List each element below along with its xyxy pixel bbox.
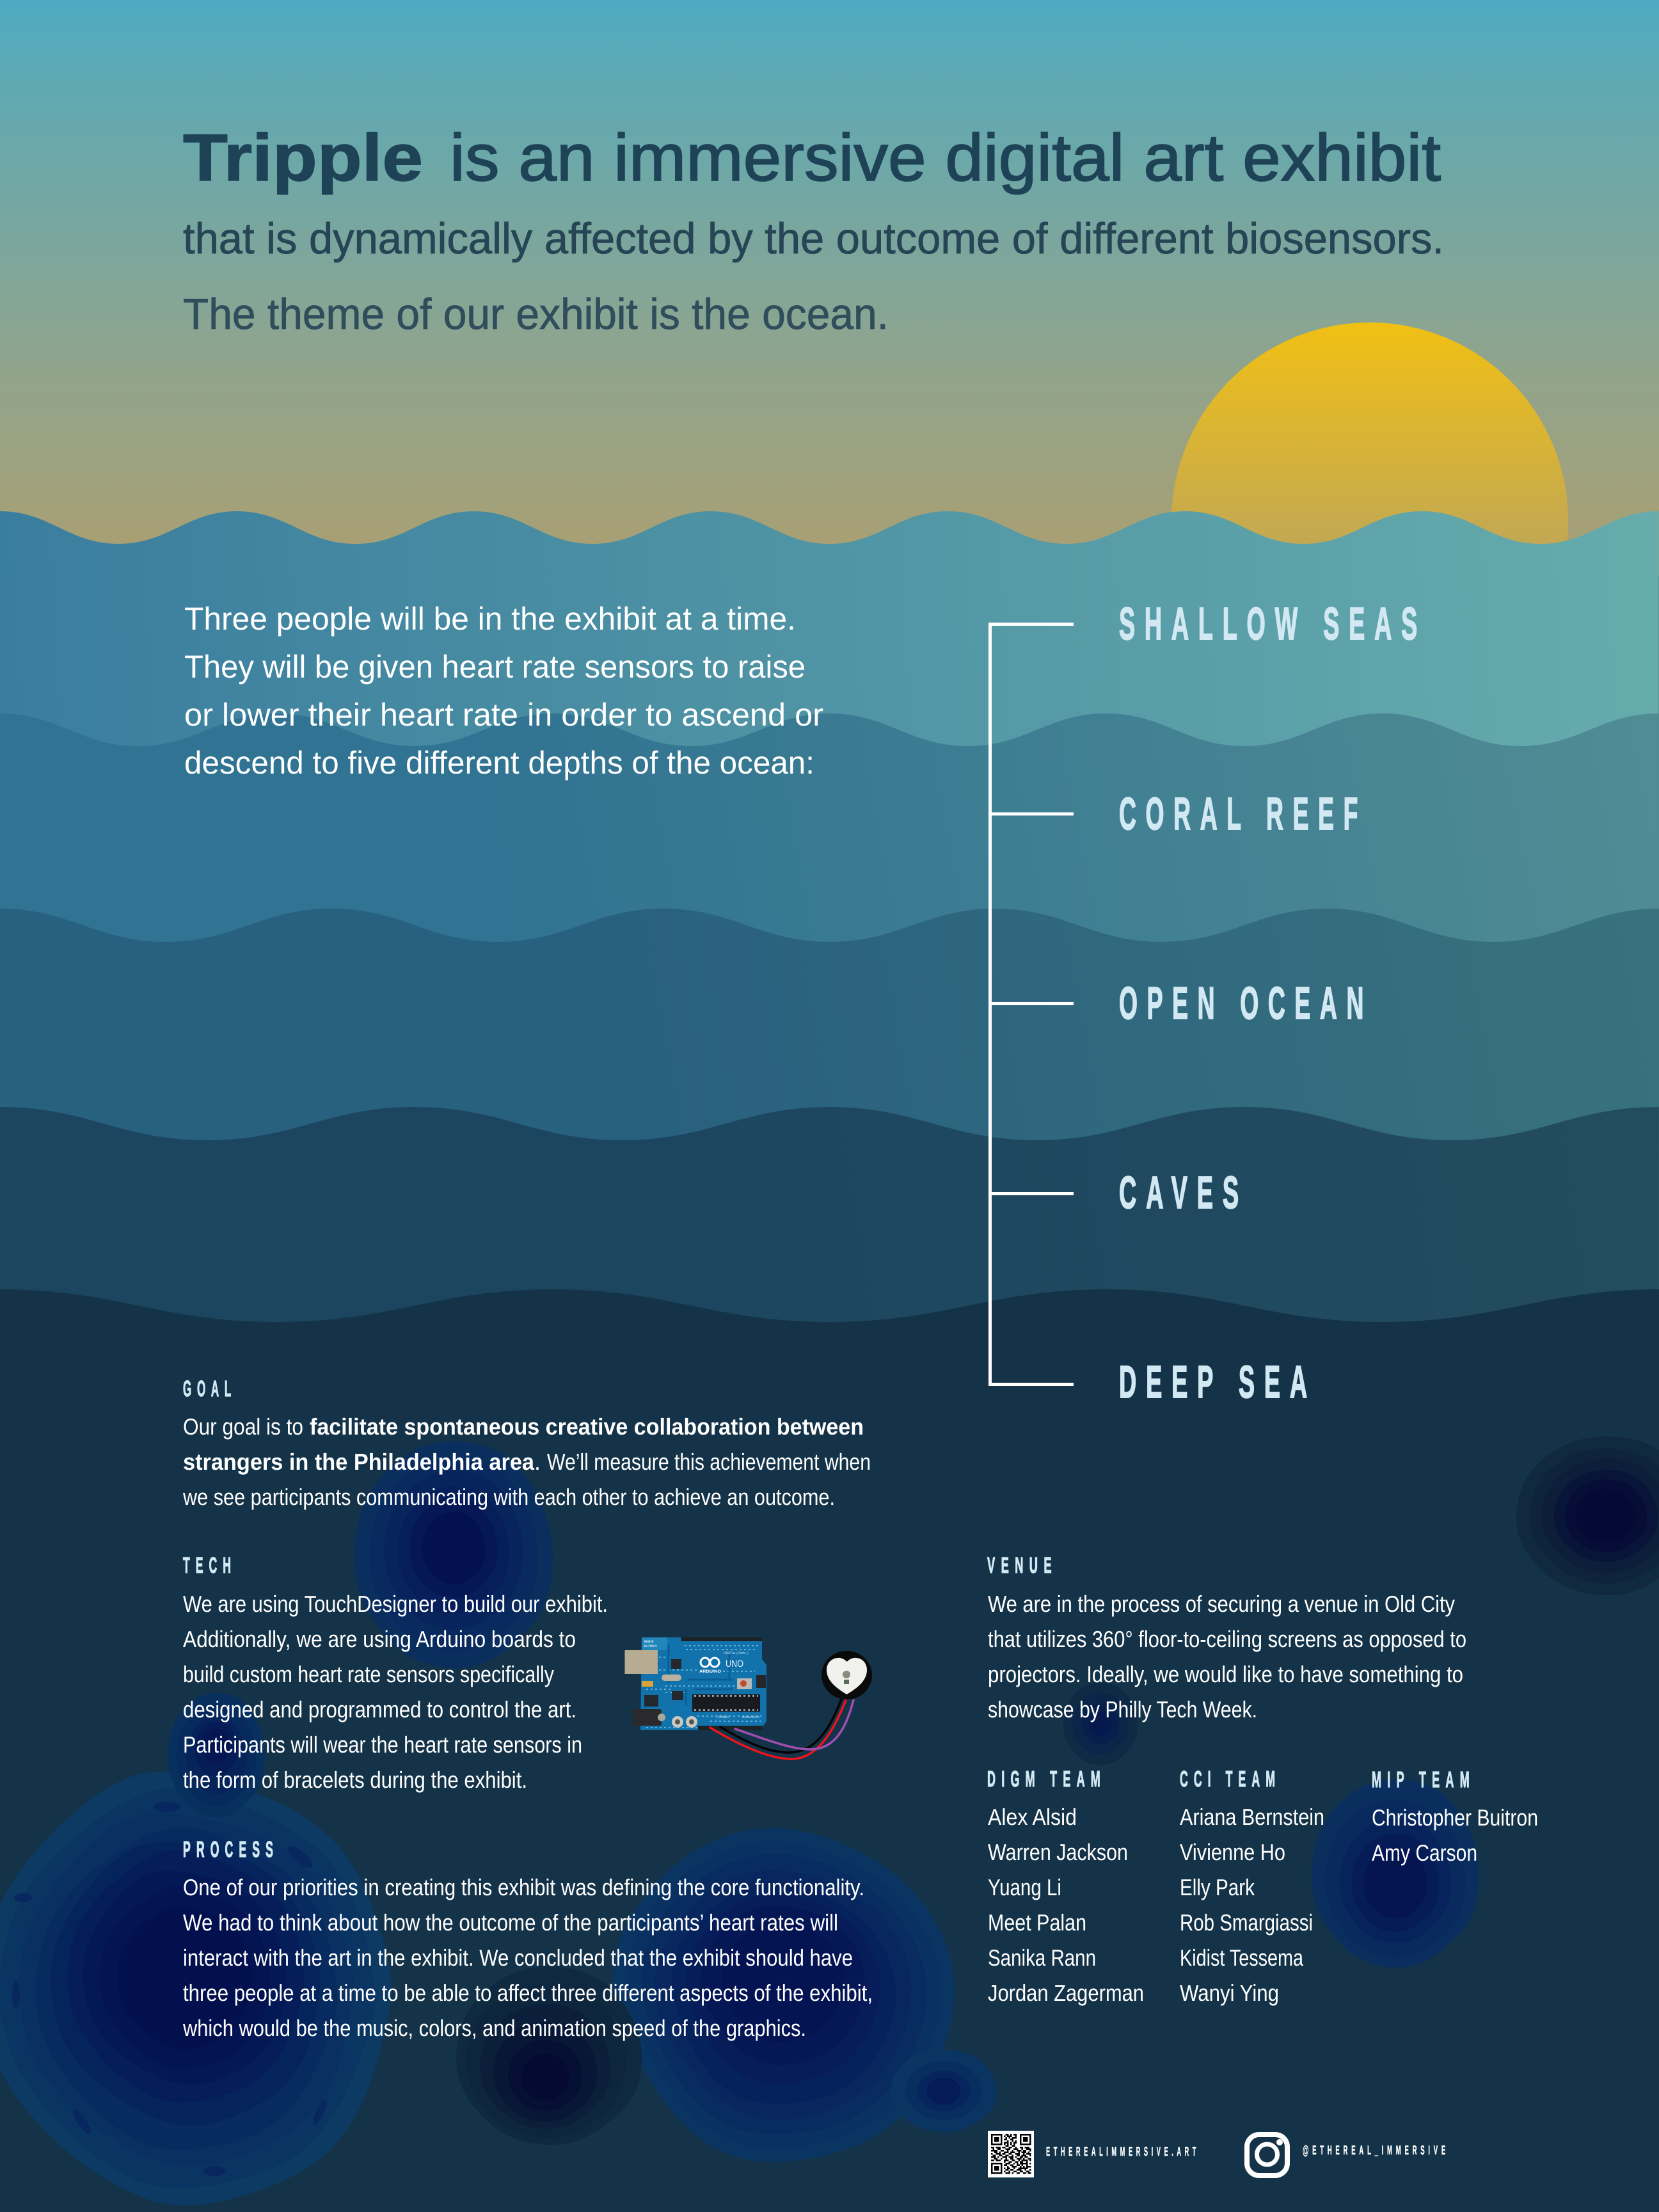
team: DIGM: [987, 1767, 1144, 2006]
process body: We had to think about how the outcome of the participants’ heart rates will: [183, 1909, 838, 1936]
venue body: that utilizes 360° floor-to-ceiling screens as opposed to: [988, 1626, 1466, 1652]
process body: [182, 1874, 873, 2041]
tech heading: TECH: [183, 1553, 237, 1578]
section: goal: [182, 1376, 871, 1510]
tech body: Additionally, we are using Arduino boards to: [183, 1626, 576, 1652]
team: DIGM: Sanika Rann: [988, 1945, 1096, 1971]
arduino board: IN ITALY: [644, 1644, 658, 1648]
venue body: showcase by Philly Tech Week.: [988, 1696, 1257, 1723]
team: MIP: Amy Carson: [1372, 1840, 1477, 1866]
QR code: [988, 2131, 1034, 2177]
team: DIGM: Meet Palan: [988, 1909, 1086, 1936]
team: DIGM: Alex Alsid: [988, 1804, 1077, 1830]
arduino board: ANALOG IN: [742, 1715, 760, 1719]
arduino board: DIGITAL (PWM~): [724, 1651, 749, 1655]
wave layer: deep sea: [0, 1289, 1659, 2212]
intro text: They will be given heart rate sensors to raise: [184, 649, 806, 685]
venue body: projectors. Ideally, we would like to have something to: [988, 1661, 1463, 1687]
team: DIGM: Warren Jackson: [988, 1839, 1128, 1865]
process body: three people at a time to be able to affect three different aspects of the exhibit,: [183, 1980, 873, 2006]
arduino board: POWER: [717, 1715, 729, 1719]
text: ETHEREALIMMERSIVE.ART: [1046, 2145, 1200, 2159]
blob: behind MIP team: [1312, 1779, 1479, 1968]
venue body: [988, 1591, 1466, 1723]
arduino board: MADE: [644, 1640, 654, 1644]
illustration: Arduino board with pulse sensor: [624, 1637, 872, 1759]
goal body: .: [534, 1449, 541, 1475]
intro text: descend to five different depths of the ocean:: [184, 745, 814, 781]
process body: which would be the music, colors, and animation speed of the graphics.: [182, 2015, 806, 2041]
team: CCI: CCI TEAM: [1180, 1767, 1281, 1792]
wires: [710, 1699, 853, 1759]
title line 2: that is dynamically affected by the outcome of different biosensors.: [183, 214, 1444, 263]
goal body: Our goal is to: [183, 1413, 303, 1440]
intro text: [184, 601, 823, 781]
team: DIGM: Yuang Li: [988, 1874, 1061, 1900]
team: DIGM: DIGM TEAM: [987, 1767, 1106, 1792]
title: [183, 121, 1444, 338]
ocean depth layers: [0, 511, 1659, 2212]
wave layer: coral reef: [0, 713, 1659, 2212]
intro text: Three people will be in the exhibit at a time.: [184, 601, 796, 637]
venue heading: VENUE: [987, 1553, 1058, 1578]
title line 1: Tripple: [183, 121, 423, 195]
team: CCI: [1180, 1767, 1324, 2006]
tech body: Participants will wear the heart rate sensors in: [183, 1731, 582, 1758]
section: tech: [183, 1553, 608, 1793]
depth labels: CAVES: [1119, 1168, 1248, 1218]
blob: bottom centre blue: [613, 1828, 955, 2162]
team: CCI: Elly Park: [1180, 1874, 1255, 1900]
depth labels: [1119, 599, 1427, 1408]
title line 1: is an immersive digital art exhibit: [450, 121, 1441, 195]
intro text: or lower their heart rate in order to ascend or: [184, 697, 823, 733]
team: MIP: Christopher Buitron: [1372, 1804, 1538, 1831]
title line 3: The theme of our exhibit is the ocean.: [183, 290, 889, 338]
goal body: [182, 1413, 871, 1510]
tech body: designed and programmed to control the art.: [183, 1696, 576, 1723]
arduino board: UNO: [726, 1659, 743, 1669]
text: @ETHEREAL_IMMERSIVE: [1303, 2144, 1449, 2158]
pulse sensor: [822, 1651, 872, 1699]
blob: under goal and tech: [354, 1442, 553, 1668]
depth labels: DEEP SEA: [1119, 1357, 1317, 1408]
blob: dark bottom centre: [456, 1967, 642, 2147]
section: process: [182, 1837, 873, 2041]
section: goal: GOAL: [183, 1376, 237, 1401]
tech body: the form of bracelets during the exhibit.: [183, 1767, 527, 1793]
sun: [1171, 322, 1568, 719]
team: CCI: Vivienne Ho: [1180, 1839, 1285, 1865]
team: CCI: Wanyi Ying: [1180, 1980, 1279, 2006]
icon: instagram: [1247, 2135, 1287, 2176]
goal body: strangers in the Philadelphia area: [183, 1449, 535, 1475]
team: MIP: MIP TEAM: [1372, 1767, 1475, 1792]
wave layer: shallow seas: [0, 511, 1659, 2212]
blob: small right of centre blob: [891, 2050, 997, 2132]
process body: One of our priorities in creating this exhibit was defining the core functionality.: [183, 1874, 864, 1900]
goal body: facilitate spontaneous creative collaboration between: [310, 1413, 864, 1440]
process heading: PROCESS: [183, 1837, 279, 1862]
sky background: [0, 0, 1659, 576]
process body: interact with the art in the exhibit. We concluded that the exhibit should have: [183, 1945, 853, 1971]
tech body: build custom heart rate sensors specifically: [183, 1661, 554, 1687]
arduino board: ARDUINO: [699, 1669, 721, 1674]
venue body: We are in the process of securing a venue in Old City: [988, 1591, 1455, 1617]
arduino board: [624, 1637, 766, 1730]
team: CCI: Kidist Tessema: [1180, 1945, 1304, 1971]
blob: small on top of large blob: [168, 1693, 265, 1817]
wave layer: open ocean: [0, 909, 1659, 2212]
team: DIGM: Jordan Zagerman: [988, 1980, 1144, 2006]
tech body: We are using TouchDesigner to build our exhibit.: [183, 1591, 608, 1617]
goal body: we see participants communicating with each other to achieve an outcome.: [182, 1484, 835, 1510]
blob: dark top right: [1516, 1436, 1659, 1595]
bioluminescent blob: large bottom left: [0, 1770, 395, 2208]
blob: small under venue: [1063, 1683, 1138, 1765]
tech body: [183, 1591, 608, 1793]
depth tree connector: [990, 625, 1074, 1385]
team: CCI: Ariana Bernstein: [1180, 1804, 1324, 1830]
team: CCI: Rob Smargiassi: [1180, 1909, 1313, 1936]
depth labels: OPEN OCEAN: [1119, 978, 1373, 1029]
team: MIP: [1372, 1767, 1538, 1866]
wave layer: caves: [0, 1107, 1659, 2212]
depth labels: CORAL REEF: [1119, 789, 1367, 839]
goal body: We’ll measure this achievement when: [547, 1449, 871, 1475]
section: venue: [987, 1553, 1466, 1723]
